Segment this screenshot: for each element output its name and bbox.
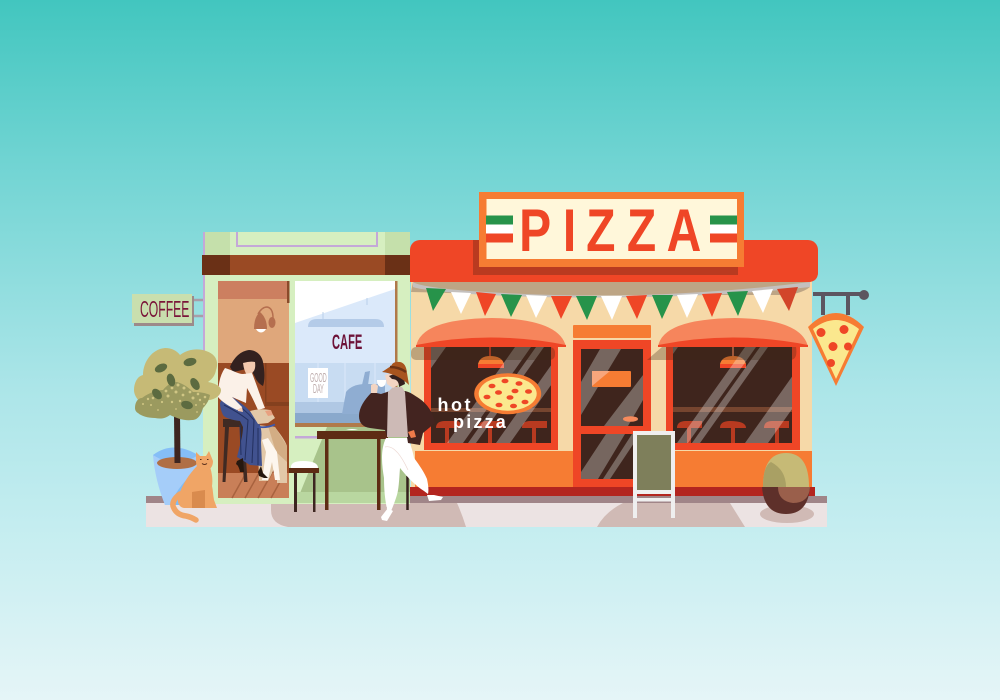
- shop door: [573, 325, 651, 487]
- cafe window lettering: CAFE: [332, 330, 362, 354]
- man chair legs: [388, 476, 408, 510]
- orange cat: [173, 451, 217, 520]
- shoes: [236, 458, 268, 478]
- dog head and collar: [250, 409, 275, 427]
- pizza shop building: [410, 192, 818, 496]
- hair: [389, 374, 405, 387]
- pocket hand: [408, 430, 416, 438]
- small stool: [289, 461, 319, 512]
- hot pizza window lettering: hot: [438, 395, 473, 415]
- cafe building: [202, 232, 410, 504]
- base wall: [415, 451, 812, 489]
- bunting flags: [426, 287, 798, 320]
- face: [243, 362, 255, 375]
- woman sitting on stool: [218, 350, 268, 482]
- right awning: [658, 318, 808, 347]
- cafe table: [317, 429, 388, 510]
- hand: [236, 404, 243, 412]
- sidewalk: [146, 496, 827, 527]
- arm hand and cup: [371, 384, 378, 393]
- sandwich board: [633, 431, 675, 518]
- tree canopy: [134, 348, 221, 402]
- bar stool: [222, 419, 248, 482]
- bucket hat: [382, 362, 409, 385]
- coffee hanging sign: COFFEE: [140, 296, 189, 322]
- pizza illustration on window: [474, 373, 541, 414]
- sweater: [387, 387, 408, 437]
- man drinking coffee: [359, 362, 443, 521]
- left awning: [416, 318, 566, 347]
- dog body: [258, 425, 287, 483]
- hair: [230, 350, 264, 386]
- sweater: [218, 368, 265, 410]
- striped trousers: [220, 397, 262, 466]
- good day card: DAY: [313, 383, 324, 397]
- potted tree: [134, 348, 221, 505]
- cafe window: [295, 281, 398, 427]
- cafe interior door panel: [218, 281, 290, 498]
- shoes: [427, 495, 443, 501]
- hanging pizza slice sign: [808, 290, 869, 386]
- pizza sign text: PIZZA: [519, 197, 701, 264]
- hot pizza window lettering: pizza: [453, 412, 508, 432]
- left shop window: [411, 347, 558, 450]
- jacket: [359, 391, 435, 445]
- round bush in planter: [760, 453, 814, 523]
- right shop window: [647, 347, 800, 450]
- right italian flag stripes: [710, 216, 737, 242]
- good day card: [308, 368, 328, 398]
- left italian flag stripes: [486, 216, 513, 242]
- roof canopy: [410, 240, 818, 282]
- face: [385, 372, 400, 388]
- pizza sign: [473, 192, 744, 275]
- roof shadow: [411, 282, 810, 296]
- white trousers: [382, 438, 428, 511]
- good day card: GOOD: [310, 372, 327, 386]
- hot pizza window lettering: [438, 395, 508, 432]
- coffee hanging sign: [132, 294, 203, 326]
